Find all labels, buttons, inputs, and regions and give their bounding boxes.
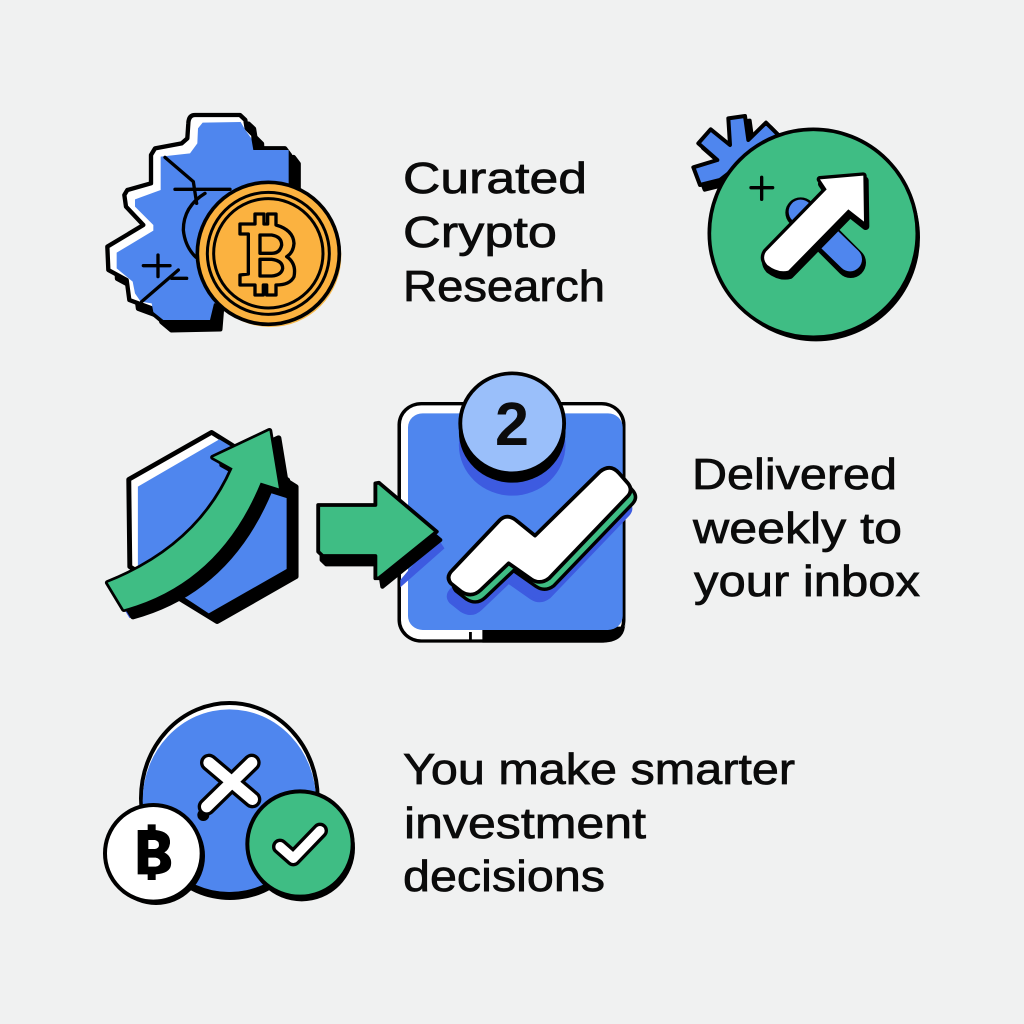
badge [459,373,566,496]
icon: decision circle with bitcoin and check [105,703,355,905]
icon: green circle with arrow [693,116,920,341]
icon: blue card with badge and trend line [397,373,635,643]
heading: Delivered weekly to your inbox: your inbox [694,557,920,606]
heading: Delivered weekly to your inbox [692,450,920,606]
heading: Curated Crypto Research [403,154,605,311]
badge number: 2 [495,390,529,458]
bitcoin coin [197,182,341,327]
heading: Curated Crypto Research: Research [403,262,605,311]
arrow: green right arrow [318,483,440,587]
heading: Delivered weekly to your inbox: weekly to [692,504,902,553]
heading: Curated Crypto Research: Curated [403,154,587,203]
heading: You make smarter investment decisions: decisions [403,852,605,901]
check circle [247,791,355,901]
heading: Curated Crypto Research: Crypto [403,208,557,257]
icon: hexagon with rising green arrow [108,431,296,622]
cross mark [197,763,252,821]
bitcoin circle [105,805,205,905]
heading: You make smarter investment decisions [403,745,795,901]
trend line [449,468,635,613]
heading: You make smarter investment decisions: investment [404,799,646,848]
icon: blue gear with bitcoin coin [107,115,341,330]
heading: Delivered weekly to your inbox: Delivered [692,450,897,499]
dark blue arrow shadow [400,537,444,587]
heading: You make smarter investment decisions: You make smarter [403,745,795,794]
